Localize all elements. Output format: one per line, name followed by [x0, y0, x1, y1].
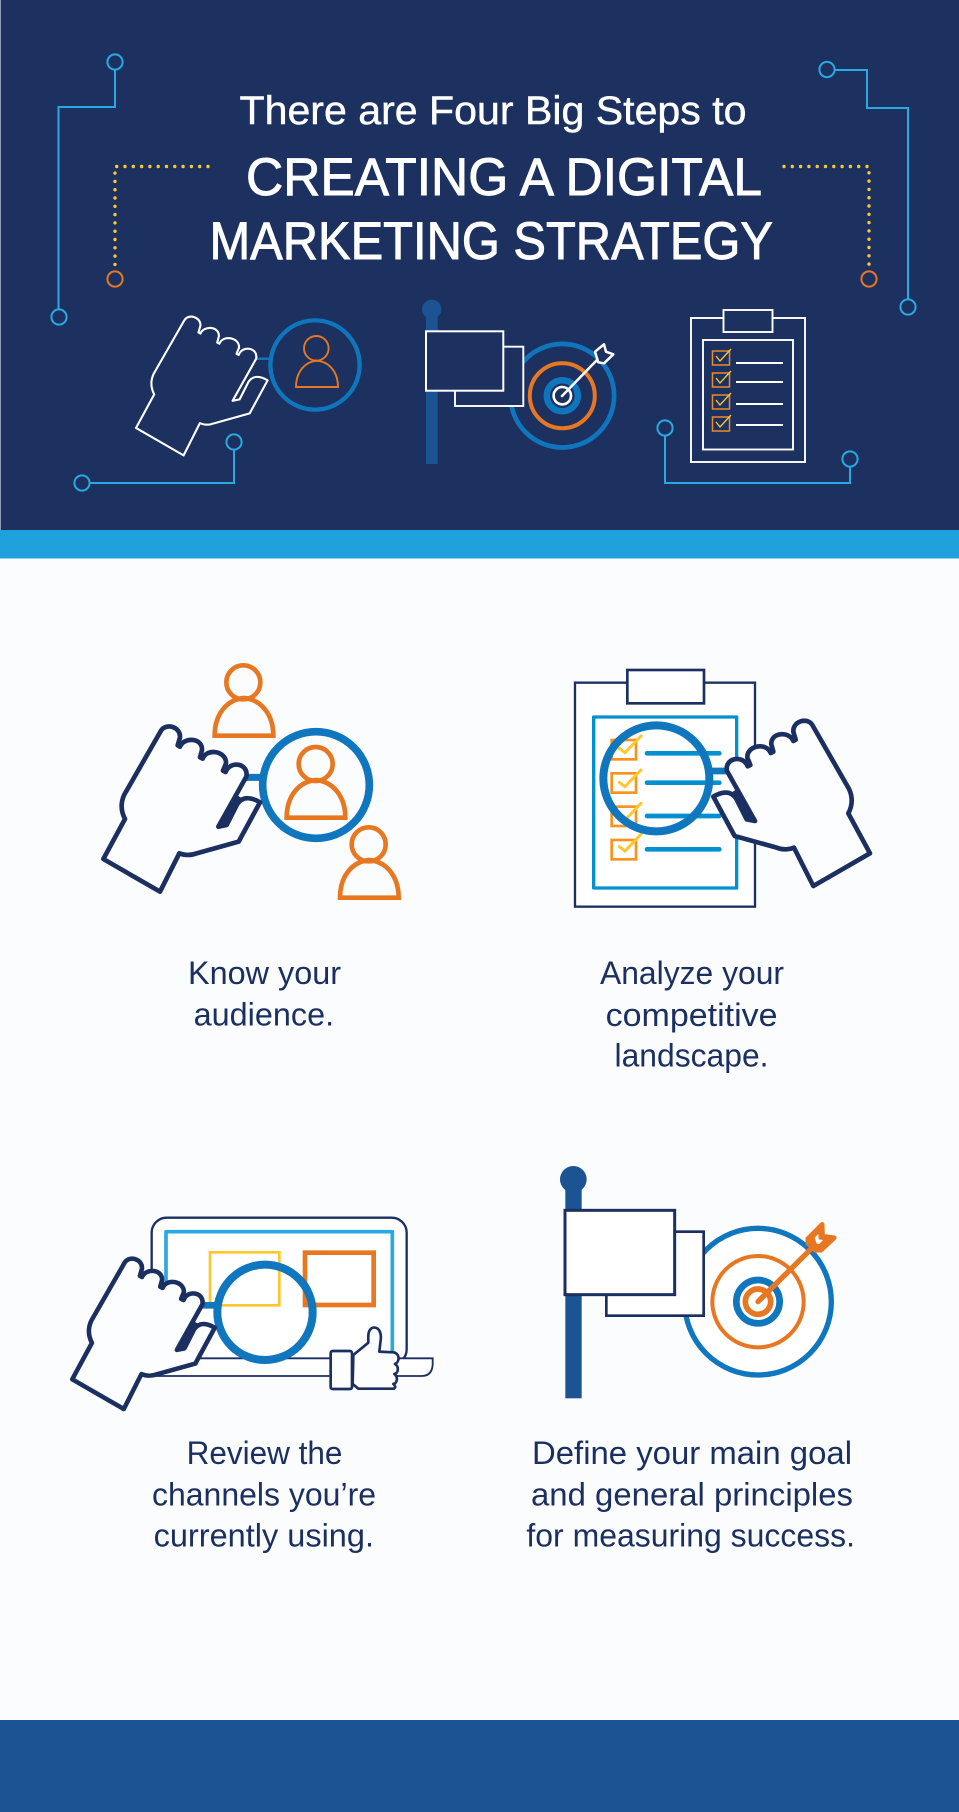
text: define your main goal: and general principles — [531, 1477, 853, 1513]
icon: flag and target — [560, 1166, 836, 1398]
text: analyze your competitive landscape — [600, 955, 784, 1074]
text: define your main goal: Define your main goal — [532, 1435, 852, 1471]
header icon: flag and target — [422, 300, 614, 464]
text: analyze your competitive landscape: landscape. — [614, 1038, 768, 1074]
text: analyze your competitive landscape: competitive — [606, 997, 778, 1033]
header icon: hand with magnifier and person — [136, 317, 360, 455]
title — [210, 89, 773, 271]
circuit lines — [51, 54, 916, 491]
icon: analyze your competitive landscape — [575, 670, 870, 907]
title: There are Four Big Steps to — [240, 89, 746, 133]
text: review the channels — [152, 1435, 376, 1554]
title: CREATING A DIGITAL — [246, 148, 762, 207]
text: define your main goal: for measuring success. — [526, 1518, 855, 1554]
text: review the channels: Review the — [187, 1435, 342, 1471]
text: review the channels: currently using. — [154, 1518, 374, 1554]
icon: review the channels — [72, 1218, 433, 1409]
text: review the channels: channels you’re — [152, 1477, 376, 1513]
footer band — [0, 1720, 959, 1812]
text: know your audience: audience. — [194, 997, 334, 1033]
icon: thumbs up — [331, 1328, 399, 1389]
title: MARKETING STRATEGY — [210, 212, 773, 271]
dotted circuit lines — [107, 166, 877, 287]
blue band — [0, 530, 959, 558]
header icon: clipboard checklist — [691, 310, 805, 462]
text: analyze your competitive landscape: Analyze your — [600, 955, 784, 991]
text: define your main goal — [526, 1435, 855, 1554]
text: know your audience — [188, 955, 341, 1033]
header panel — [0, 0, 959, 530]
icon: know your audience — [103, 665, 399, 898]
text: know your audience: Know your — [188, 955, 341, 991]
